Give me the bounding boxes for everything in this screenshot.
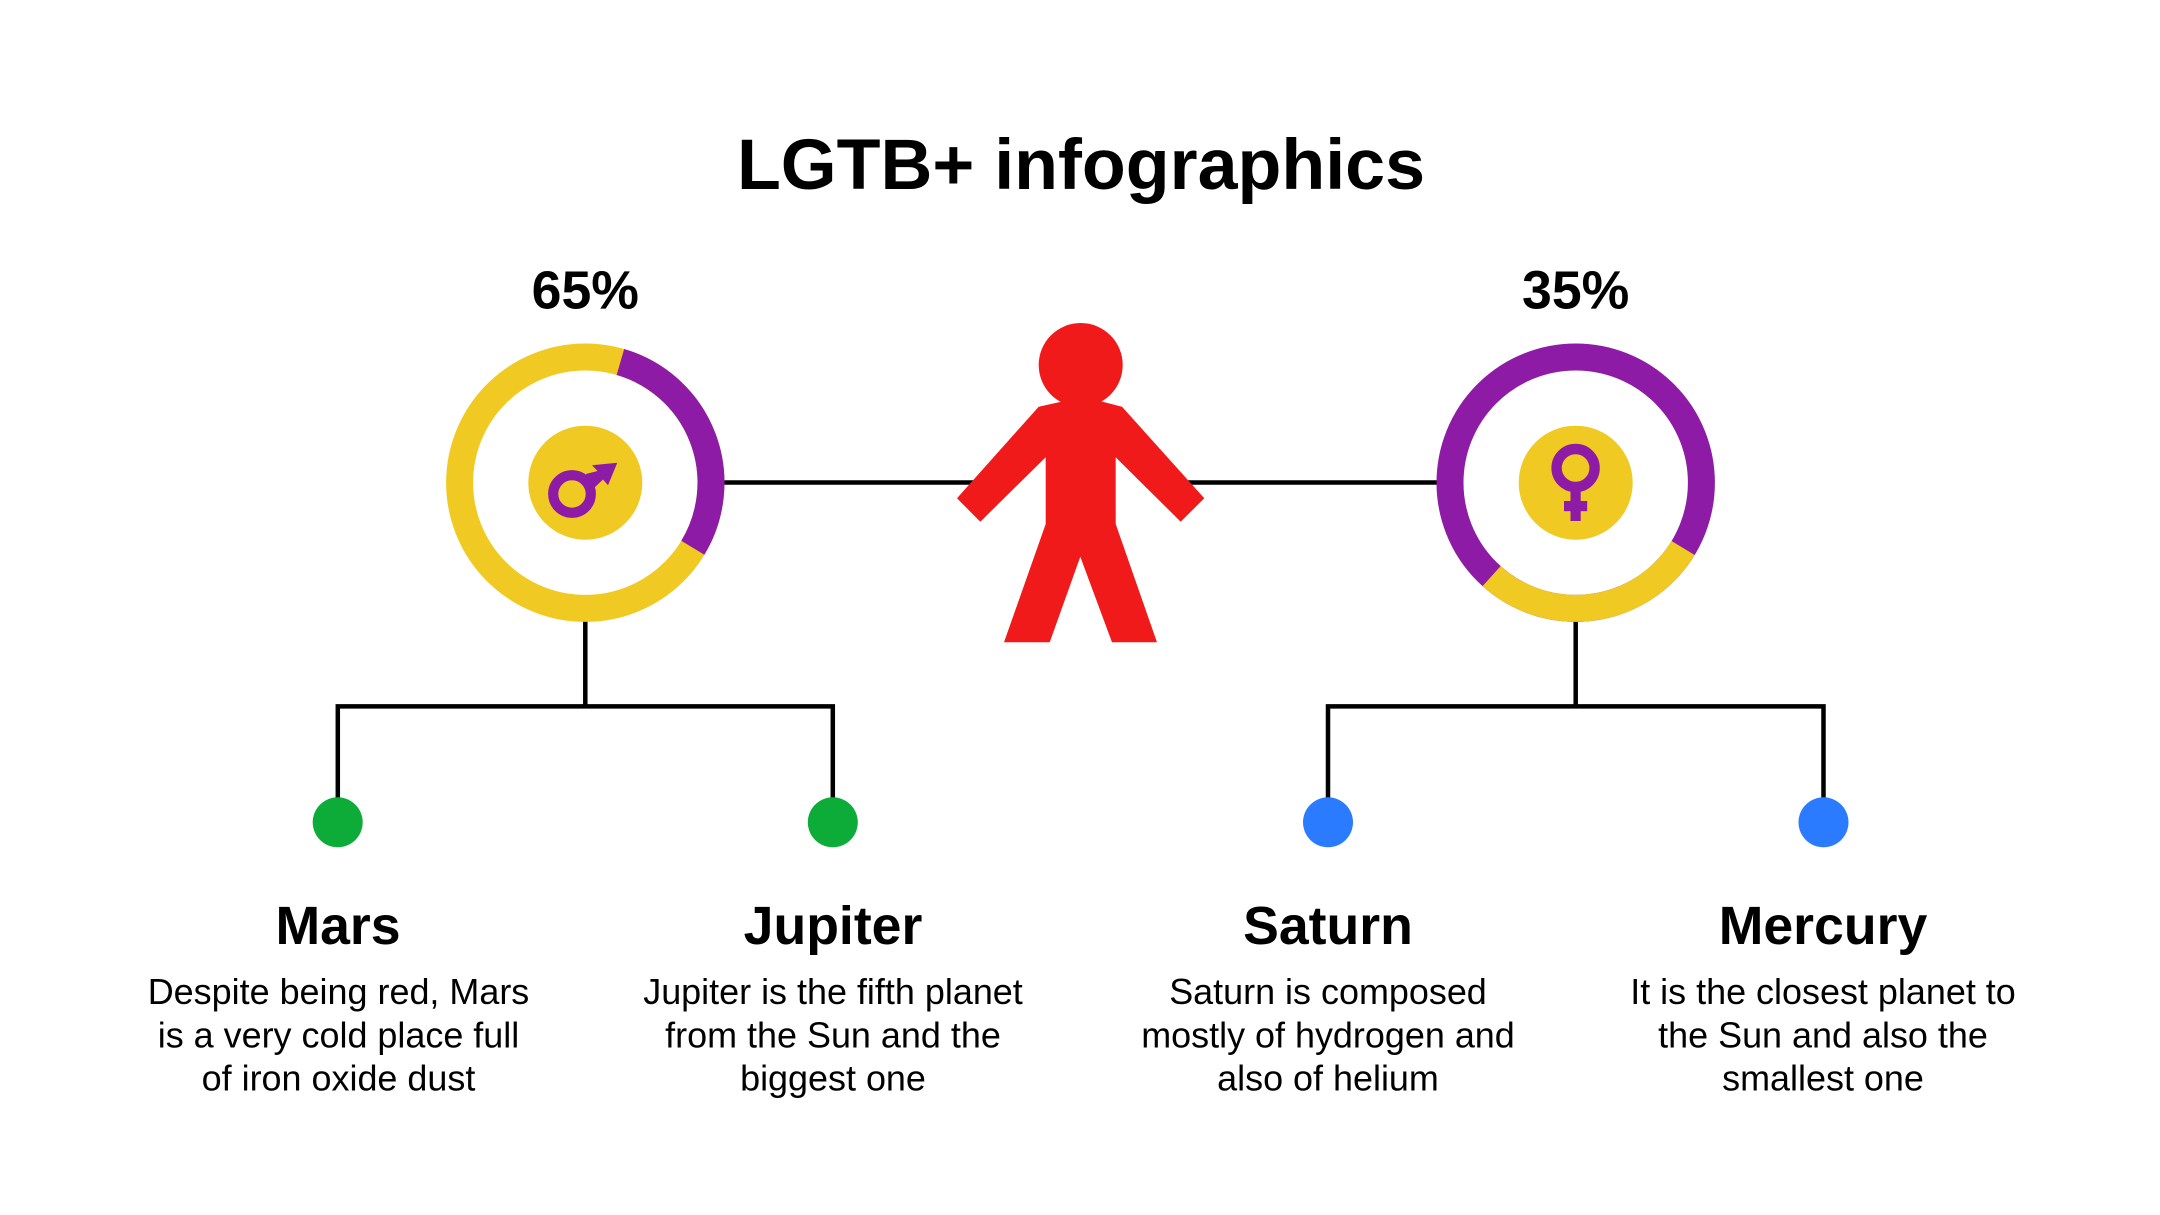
- heading: Mars: [275, 896, 401, 956]
- connector line: left ring to figure: [724, 480, 1000, 485]
- title: LGTB+ infographics: [737, 125, 1425, 205]
- donut ring 35%: [1450, 357, 1701, 608]
- description: biggest one: [740, 1058, 926, 1099]
- panel: Saturn: [1141, 797, 1515, 1099]
- panel: Mars: [148, 797, 529, 1099]
- description: mostly of hydrogen and: [1141, 1014, 1515, 1055]
- description: of iron oxide dust: [202, 1058, 475, 1099]
- panel: left gauge 65%: [460, 260, 711, 608]
- connector lines: right tree: [1328, 621, 1824, 822]
- heading: Saturn: [1243, 896, 1413, 956]
- panel: right gauge 35%: [1450, 260, 1701, 608]
- percentage label 65%: 65%: [532, 260, 639, 320]
- icon: red human figure: [957, 323, 1204, 642]
- description: the Sun and also the: [1658, 1014, 1988, 1055]
- icon: male symbol: [528, 426, 642, 540]
- description: Despite being red, Mars: [148, 971, 529, 1012]
- percentage label 35%: 35%: [1522, 260, 1629, 320]
- description: It is the closest planet to: [1630, 971, 2016, 1012]
- description: Saturn is composed: [1169, 971, 1487, 1012]
- description: Jupiter is the fifth planet: [643, 971, 1023, 1012]
- marker dot: [808, 797, 858, 847]
- marker dot: [313, 797, 363, 847]
- icon: female symbol: [1519, 426, 1633, 540]
- panel: Mercury: [1630, 797, 2016, 1099]
- connector line: figure to right ring: [1160, 480, 1438, 485]
- heading: Mercury: [1719, 896, 1927, 956]
- marker dot: [1798, 797, 1848, 847]
- heading: Jupiter: [744, 896, 922, 956]
- description: from the Sun and the: [665, 1014, 1001, 1055]
- donut ring 65%: [460, 357, 711, 608]
- description: is a very cold place full: [158, 1014, 519, 1055]
- description: smallest one: [1722, 1058, 1924, 1099]
- connector lines: left tree: [338, 621, 833, 822]
- panel: Jupiter: [643, 797, 1023, 1099]
- marker dot: [1303, 797, 1353, 847]
- description: also of helium: [1217, 1058, 1439, 1099]
